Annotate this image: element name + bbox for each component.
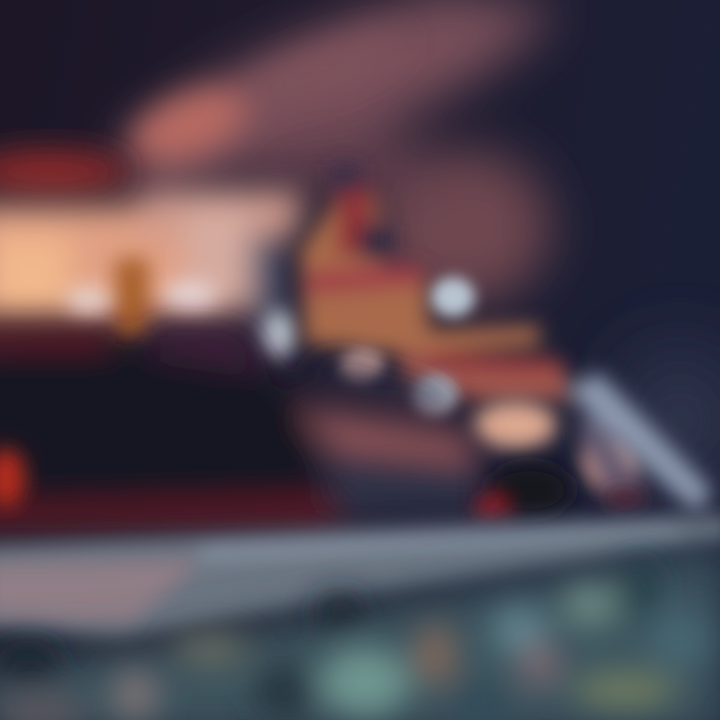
smoke plume [120,0,560,305]
white windows [340,277,475,415]
warm glow at stern [473,401,638,490]
foreground mottled figures [0,560,712,720]
crane tower [115,258,149,343]
right sky haze [620,350,720,490]
red hull marking [0,448,26,508]
ship superstructure [300,165,575,400]
tugboat at stern [474,464,647,518]
gantry crane arm [565,372,712,515]
smoke highlight [121,19,412,176]
dock walkway [0,515,720,640]
glowing skyline on left [0,190,300,325]
white lights on skyline [66,281,296,360]
crowded foreground [0,545,720,720]
ship hull [0,325,480,530]
top-left red glow [0,150,130,194]
